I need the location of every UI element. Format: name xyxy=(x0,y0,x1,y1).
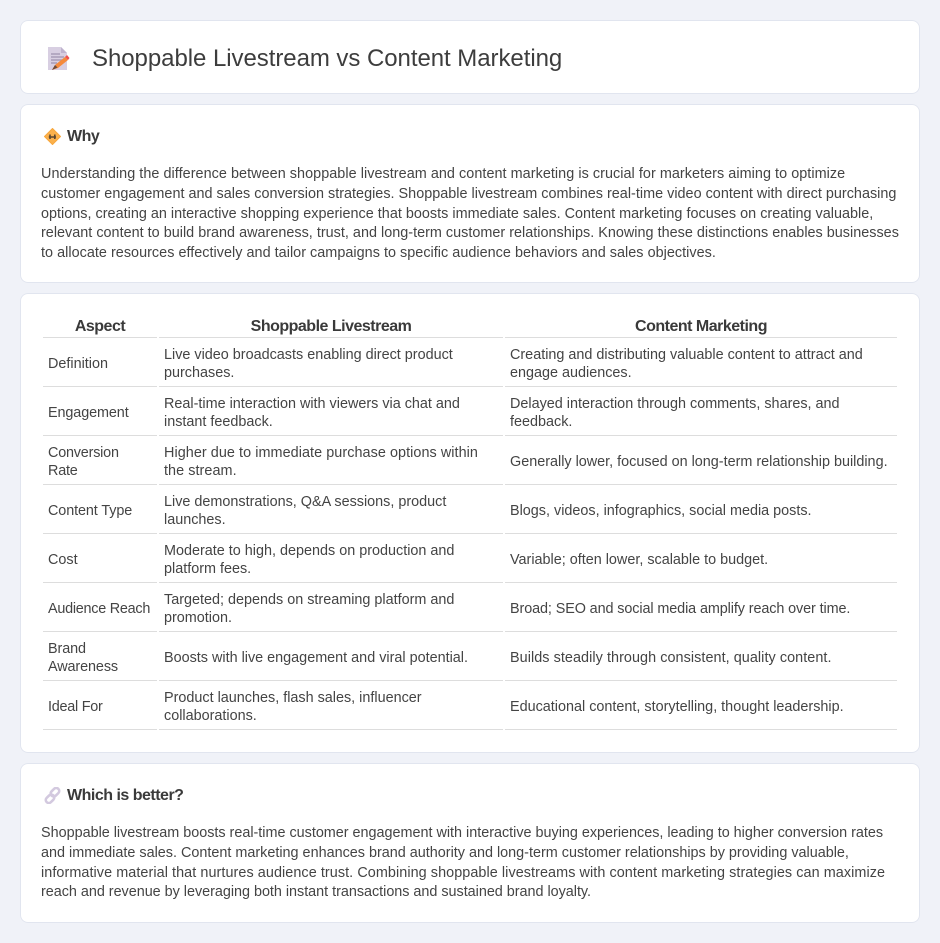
row: engagement: Engagement xyxy=(48,405,129,421)
panel: title xyxy=(20,20,920,94)
why paragraph: options, creating an interactive shopping experience that boosts immediate sales. Content marketing focuses on creating valuable, xyxy=(41,206,873,222)
icon: chain link xyxy=(44,787,60,804)
table header row: Shoppable Livestream xyxy=(251,318,411,335)
why paragraph: Understanding the difference between shoppable livestream and content marketing is crucial for marketers aiming to optimize xyxy=(41,166,845,182)
row: audience reach xyxy=(43,592,897,632)
row: ideal for xyxy=(43,690,897,730)
why heading: Why xyxy=(67,128,99,145)
which is better paragraph: Shoppable livestream boosts real-time customer engagement with interactive buying experiences, leading to higher conversion rates xyxy=(41,825,883,841)
which is better paragraph: informative material that nurtures audience trust. Combining shoppable livestreams with content marketing strategies can maximize xyxy=(41,865,885,881)
row: cost: Variable; often lower, scalable to budget. xyxy=(510,552,768,568)
row: conversion rate: Generally lower, focused on long-term relationship building. xyxy=(510,454,888,470)
why paragraph: relevant content to build brand awareness, trust, and long-term customer relationships. Knowing these distinctions enables businesses xyxy=(41,225,899,241)
row: ideal for: Ideal For xyxy=(48,699,103,715)
row: audience reach: Audience Reach xyxy=(48,601,150,617)
row: audience reach: Broad; SEO and social media amplify reach over time. xyxy=(510,601,850,617)
panel: comparison table xyxy=(20,293,920,753)
row: content type: Live demonstrations, Q&A sessions, product xyxy=(164,494,446,510)
row: cost: Moderate to high, depends on production and xyxy=(164,543,454,559)
row: conversion rate: Higher due to immediate purchase options within xyxy=(164,445,478,461)
which is better paragraph xyxy=(41,825,885,900)
row: content type: Content Type xyxy=(48,503,132,519)
row: audience reach: Targeted; depends on streaming platform and xyxy=(164,592,454,608)
row: audience reach: promotion. xyxy=(164,610,232,626)
row: brand awareness xyxy=(43,641,897,681)
row: conversion rate: Conversion xyxy=(48,445,119,461)
row: engagement: feedback. xyxy=(510,414,572,430)
row: content type: launches. xyxy=(164,512,226,528)
row: ideal for: collaborations. xyxy=(164,708,257,724)
row: cost: platform fees. xyxy=(164,561,251,577)
row: definition: Definition xyxy=(48,356,108,372)
row: brand awareness: Awareness xyxy=(48,659,118,675)
row: brand awareness: Brand xyxy=(48,641,86,657)
row: definition xyxy=(43,347,897,387)
row: ideal for: Product launches, flash sales, influencer xyxy=(164,690,422,706)
icon: warning diamond xyxy=(44,128,61,145)
row: conversion rate: the stream. xyxy=(164,463,237,479)
which is better paragraph: and immediate sales. Content marketing enhances brand authority and long-term customer relationships by providing valuable, xyxy=(41,845,849,861)
row: engagement xyxy=(43,396,897,436)
row: ideal for: Educational content, storytelling, thought leadership. xyxy=(510,699,844,715)
row: definition: Live video broadcasts enabling direct product xyxy=(164,347,453,363)
table header row: Content Marketing xyxy=(635,318,767,335)
comparison table grid xyxy=(43,318,897,730)
which is better heading: Which is better? xyxy=(67,787,183,804)
row: engagement: Delayed interaction through comments, shares, and xyxy=(510,396,840,412)
row: conversion rate: Rate xyxy=(48,463,78,479)
row: engagement: Real-time interaction with viewers via chat and xyxy=(164,396,460,412)
row: definition: engage audiences. xyxy=(510,365,632,381)
row: engagement: instant feedback. xyxy=(164,414,273,430)
row: content type: Blogs, videos, infographics, social media posts. xyxy=(510,503,812,519)
icon: memo with pencil xyxy=(48,47,70,70)
row: brand awareness: Builds steadily through consistent, quality content. xyxy=(510,650,832,666)
row: cost xyxy=(43,543,897,583)
title heading: Shoppable Livestream vs Content Marketing xyxy=(92,45,562,72)
panel: which is better xyxy=(20,763,920,923)
why paragraph xyxy=(41,166,899,261)
row: cost: Cost xyxy=(48,552,78,568)
table header row: Aspect xyxy=(75,318,125,335)
table header row xyxy=(43,318,897,338)
row: brand awareness: Boosts with live engagement and viral potential. xyxy=(164,650,468,666)
why paragraph: to allocate resources effectively and tailor campaigns to specific audience behaviors and sales objectives. xyxy=(41,245,716,261)
row: conversion rate xyxy=(43,445,897,485)
panel: why xyxy=(20,104,920,283)
row: content type xyxy=(43,494,897,534)
row: definition: Creating and distributing valuable content to attract and xyxy=(510,347,863,363)
row: definition: purchases. xyxy=(164,365,234,381)
which is better paragraph: reach and revenue by leveraging both instant transactions and sustained brand loyalty. xyxy=(41,884,591,900)
why paragraph: customer engagement and sales conversion strategies. Shoppable livestream combines real-time video content with direct purchasing xyxy=(41,186,896,202)
